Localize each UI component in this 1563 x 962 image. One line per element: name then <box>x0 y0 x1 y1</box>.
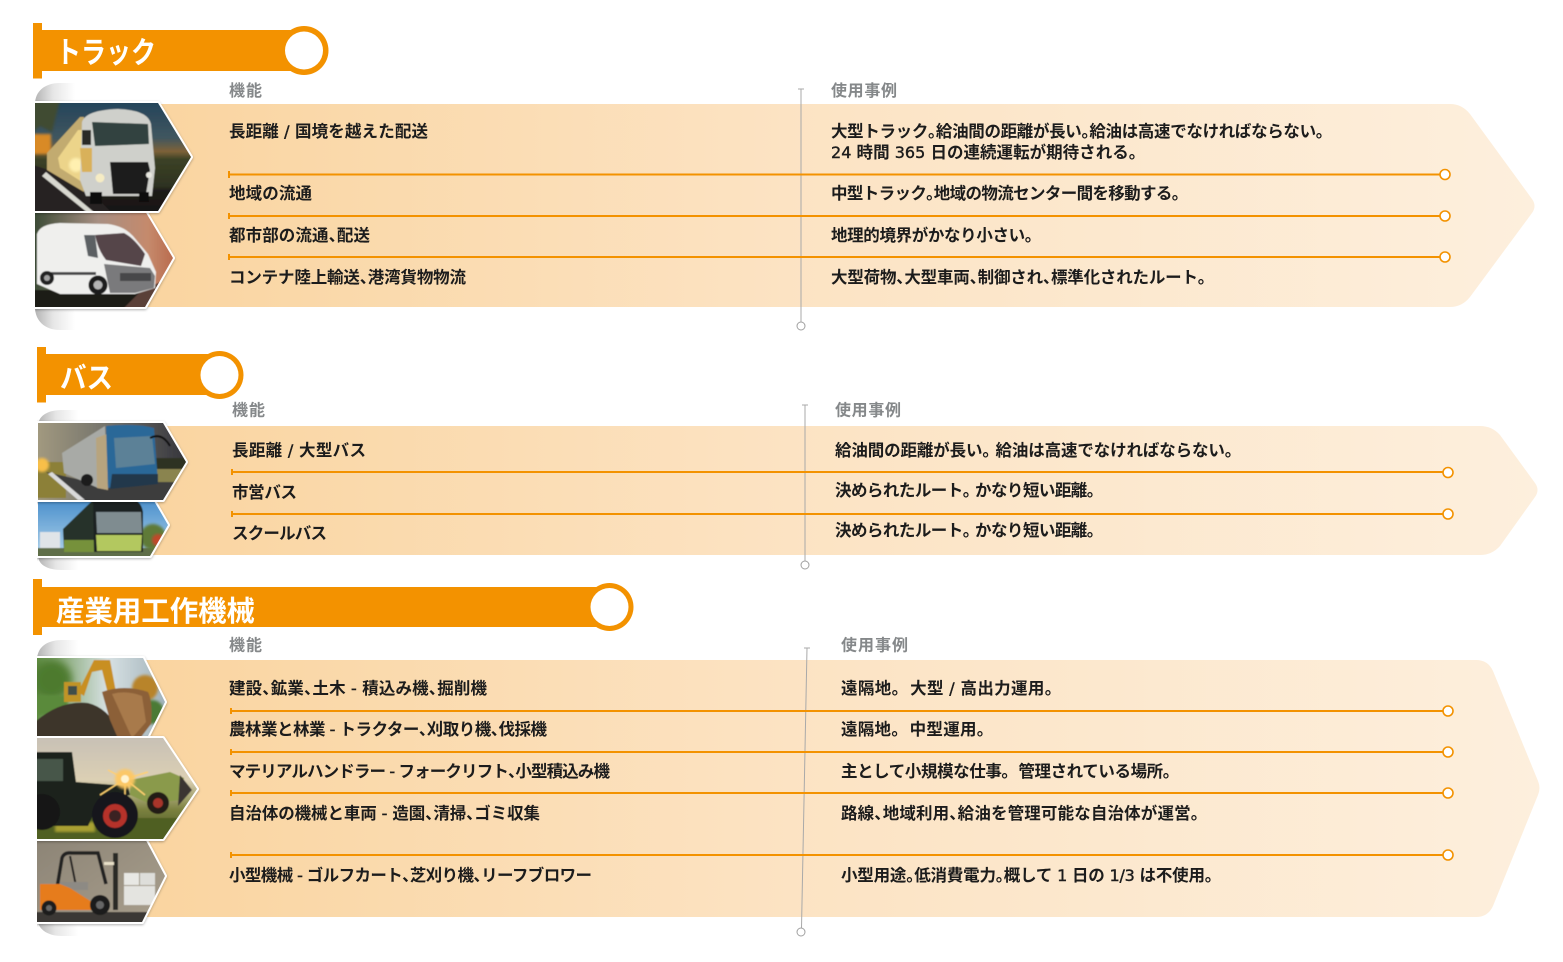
row divider 1 <box>231 706 1453 716</box>
use case: compact: 小型用途。低消費電力。概して 1 日の 1/3 は不使用。 <box>841 862 1213 886</box>
heading: industrial machinery: 産業用工作機械 <box>56 596 255 628</box>
use case: school bus: 決められたルート。 かなり短い距離。 <box>835 517 1095 541</box>
column divider <box>797 648 810 936</box>
use case: city bus: 決められたルート。 かなり短い距離。 <box>835 477 1095 501</box>
section: bus <box>28 347 1538 570</box>
function: material handling: マテリアルハンドラー - フォークリフト、小型積込み機 <box>229 758 610 782</box>
photo: tractor <box>24 736 199 841</box>
section: truck <box>25 23 1534 330</box>
use case: long distance <box>831 118 1324 163</box>
function: school bus: スクールバス <box>232 520 327 544</box>
row divider 3 <box>229 252 1450 262</box>
use case: construction: 遠隔地。 大型 / 高出力運用。 <box>841 667 1053 702</box>
photo: truck <box>25 100 193 213</box>
function: urban: 都市部の流通、配送 <box>229 222 370 246</box>
heading: bus <box>37 347 244 402</box>
heading: truck <box>33 23 328 78</box>
heading: truck: トラック <box>56 37 156 70</box>
row divider 2 <box>232 509 1453 519</box>
use case: container: 大型荷物、大型車両、制御され、標準化されたルート。 <box>831 264 1206 288</box>
row divider 2 <box>229 211 1450 221</box>
row divider 3 <box>231 788 1453 798</box>
function: agriculture: 農林業と林業 - トラクター、刈取り機、伐採機 <box>229 716 548 740</box>
photo: forklift <box>37 841 168 926</box>
column divider <box>801 405 809 569</box>
decorative curl: bus top <box>38 410 78 426</box>
function: compact: 小型機械 - ゴルフカート、芝刈り機、リーフブロワー <box>229 862 592 886</box>
use case: urban: 地理的境界がかなり小さい。 <box>831 222 1033 246</box>
column heading: use cases: 使用事例 <box>841 636 908 654</box>
arrow panel: bus <box>38 426 1538 555</box>
use case: long distance: 24 時間 365 日の連続運転が期待される。 <box>831 139 1137 163</box>
column heading: function: 機能 <box>229 636 262 654</box>
column heading: use cases: 使用事例 <box>831 81 897 100</box>
use case: material handling: 主として小規模な仕事。 管理されている場所。 <box>841 750 1171 785</box>
column divider <box>797 89 805 330</box>
function: long distance: 長距離 / 国境を越えた配送 <box>229 118 428 142</box>
row divider 4 <box>231 850 1453 860</box>
row divider 1 <box>229 170 1450 180</box>
use case: regional: 中型トラック。地域の物流センター間を移動する。 <box>831 180 1180 204</box>
use case: long distance: 大型トラック。給油間の距離が長い。給油は高速でなければならない。 <box>831 118 1324 142</box>
heading: bus: バス <box>60 363 113 395</box>
function: regional: 地域の流通 <box>229 180 312 204</box>
arrow panel: truck <box>35 104 1534 307</box>
function: construction: 建設、鉱業、土木 - 積込み機、掘削機 <box>229 675 488 699</box>
photo: excavator <box>37 656 168 736</box>
section: industrial machinery <box>24 579 1540 936</box>
decorative curl: truck top <box>35 83 75 104</box>
function: municipal: 自治体の機械と車両 - 造園、清掃、ゴミ収集 <box>229 800 540 824</box>
use case: agriculture: 遠隔地。 中型運用。 <box>841 708 985 743</box>
column heading: function: 機能 <box>232 400 265 420</box>
use case: municipal: 路線、地域利用、給油を管理可能な自治体が運営。 <box>841 800 1199 824</box>
decorative curl: machinery bottom <box>37 917 78 936</box>
use case: long-distance bus: 給油間の距離が長い。 給油は高速でなければならない。 <box>835 437 1233 461</box>
photo: van <box>35 213 176 312</box>
column heading: function: 機能 <box>229 81 262 100</box>
arrow panel: machinery <box>37 660 1540 917</box>
function: long-distance bus: 長距離 / 大型バス <box>232 437 366 461</box>
photo: city bus <box>37 502 171 560</box>
column heading: use cases: 使用事例 <box>835 400 901 420</box>
function: city bus: 市営バス <box>232 479 297 503</box>
function: container: コンテナ陸上輸送、港湾貨物物流 <box>229 264 466 288</box>
row divider 2 <box>231 747 1453 757</box>
decorative curl: machinery top <box>37 640 78 660</box>
row divider 1 <box>232 468 1453 478</box>
heading: industrial machinery <box>33 579 634 635</box>
photo: coach bus <box>28 421 190 502</box>
decorative curl: truck bottom <box>35 307 75 330</box>
decorative curl: bus bottom <box>38 555 78 570</box>
